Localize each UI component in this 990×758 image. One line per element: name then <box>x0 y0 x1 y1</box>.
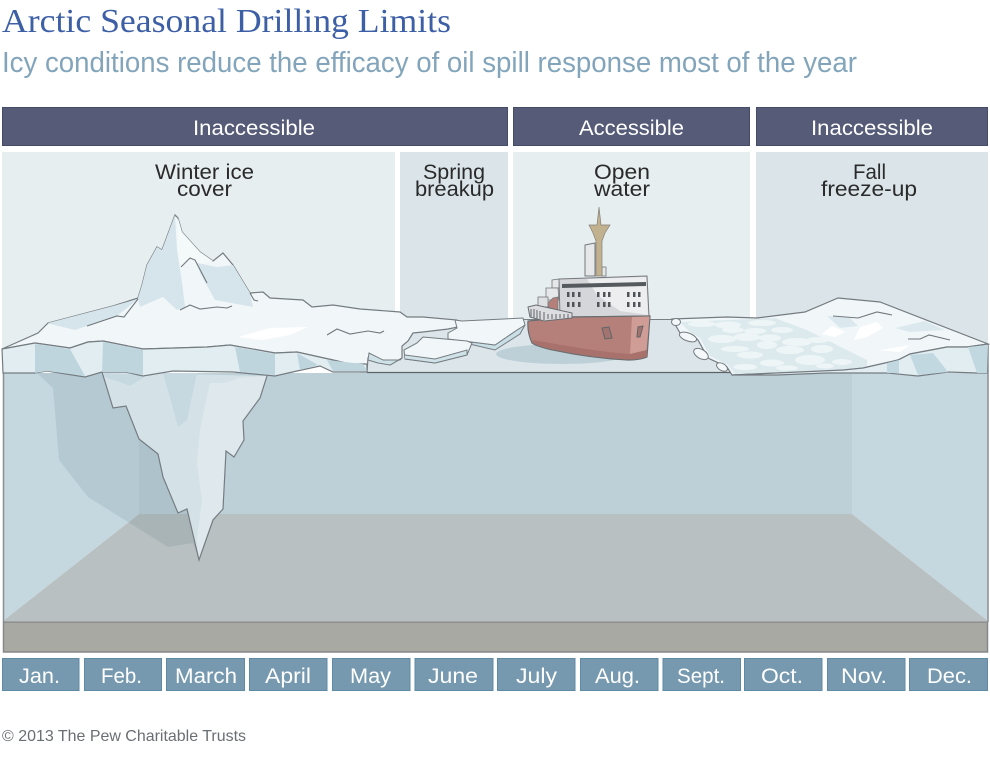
deck rail <box>528 305 572 321</box>
month: October: Oct. <box>761 665 803 688</box>
month: February: Feb. <box>101 665 142 688</box>
pancake ice floes <box>688 320 852 370</box>
floe: fragment <box>368 353 402 365</box>
bar: accessible summer: Accessible <box>579 117 684 140</box>
lifeboat <box>547 297 558 312</box>
water side edges <box>4 344 988 622</box>
upper left darker facet <box>104 373 143 386</box>
left water wall <box>3 373 139 621</box>
month: April: April <box>265 665 311 688</box>
subtitle: Icy conditions reduce the efficacy of oil spill response most of the year <box>2 47 857 79</box>
seabed front face <box>4 622 988 652</box>
ship shadow <box>496 344 628 364</box>
ice top surface <box>2 215 458 372</box>
mast <box>589 207 610 276</box>
hull hatches <box>602 326 643 339</box>
month: April <box>250 658 327 690</box>
month: July <box>498 658 575 690</box>
stairs deck <box>546 288 559 300</box>
hull lower band <box>533 340 647 360</box>
month: December: Dec. <box>927 665 972 688</box>
freezing ice sheet top <box>672 298 988 375</box>
back wall of water <box>139 373 852 514</box>
month: August: Aug. <box>595 665 640 688</box>
bar: inaccessible winter and spring: Inaccessible <box>193 117 315 140</box>
ice highlight <box>238 327 308 340</box>
bar: accessible summer <box>514 108 750 146</box>
panel: spring breakup <box>400 152 508 322</box>
floe: right large <box>448 318 525 350</box>
right water wall <box>852 373 988 621</box>
icebreaker ship <box>496 207 650 364</box>
month: October <box>744 658 822 690</box>
peak right shade <box>197 263 253 307</box>
front ice facets <box>887 345 988 375</box>
ocean cross-section <box>3 344 988 652</box>
hull bow panel <box>630 316 650 354</box>
deckhouse <box>538 297 548 307</box>
month: July: July <box>516 665 558 688</box>
month: December <box>910 658 988 690</box>
panel: winter ice cover <box>2 152 395 350</box>
ice cracks <box>833 312 950 340</box>
water surface plane <box>360 319 745 373</box>
ice highlights <box>822 322 910 352</box>
month: March: March <box>175 665 237 688</box>
front ice face <box>2 341 367 377</box>
bar: inaccessible winter and spring <box>2 108 508 146</box>
ledge shade <box>48 299 138 330</box>
month: January <box>2 658 79 690</box>
access status bars <box>2 108 988 146</box>
month: February <box>84 658 162 690</box>
panel: winter ice cover: cover <box>177 178 232 201</box>
panel: fall freeze-up: freeze-up <box>821 178 917 201</box>
floe: lower <box>404 337 472 363</box>
copyright footer: © 2013 The Pew Charitable Trusts <box>2 728 246 745</box>
month: May <box>332 658 410 690</box>
month: November: Nov. <box>841 665 887 688</box>
fall freeze-up ice <box>672 298 988 376</box>
panel: spring breakup: Spring <box>423 161 485 184</box>
month: September <box>663 658 740 690</box>
month: August <box>580 658 658 690</box>
month: June: June <box>428 665 478 688</box>
panel: open water <box>513 152 750 322</box>
bar: inaccessible fall: Inaccessible <box>811 117 933 140</box>
small funnel box <box>602 267 606 276</box>
spring breakup ice floes <box>368 318 525 365</box>
month: March <box>166 658 244 690</box>
main iceberg above water <box>2 215 458 377</box>
superstructure <box>559 276 649 317</box>
bridge <box>552 279 559 288</box>
month labels <box>2 658 988 690</box>
bar: inaccessible fall <box>756 108 988 146</box>
panel: spring breakup: breakup <box>415 178 494 201</box>
month: November <box>828 658 905 690</box>
month: January: Jan. <box>19 665 60 688</box>
month: September: Sept. <box>677 665 725 688</box>
peak center highlight <box>178 218 213 267</box>
water surface front line <box>367 372 732 374</box>
iceberg below water <box>102 372 267 560</box>
panel: open water: water <box>593 178 650 201</box>
ice cracks <box>87 258 384 335</box>
seabed floor <box>3 514 988 621</box>
month: May: May <box>350 665 392 688</box>
back funnel <box>585 243 595 276</box>
underwater outline <box>102 372 267 560</box>
peak left shade <box>138 215 185 310</box>
small drifting floes <box>672 318 729 373</box>
hull <box>528 316 650 360</box>
window strip <box>562 282 646 288</box>
superstructure highlight <box>587 277 648 315</box>
pancake ice shade <box>680 318 867 374</box>
iceberg shadow <box>37 372 267 560</box>
top shade patches <box>827 316 945 332</box>
panel: open water: Open <box>594 161 650 184</box>
front ice facets <box>35 342 367 376</box>
month: June <box>415 658 493 690</box>
windows <box>567 292 640 307</box>
front ice face <box>732 344 988 376</box>
title: Arctic Seasonal Drilling Limits <box>2 3 451 40</box>
panel: winter ice cover: Winter ice <box>155 161 254 184</box>
season panels <box>2 152 988 350</box>
panel: fall freeze-up: Fall <box>853 161 886 184</box>
light facet <box>197 376 267 560</box>
central darker facet <box>163 373 197 427</box>
panel: fall freeze-up <box>756 152 988 346</box>
